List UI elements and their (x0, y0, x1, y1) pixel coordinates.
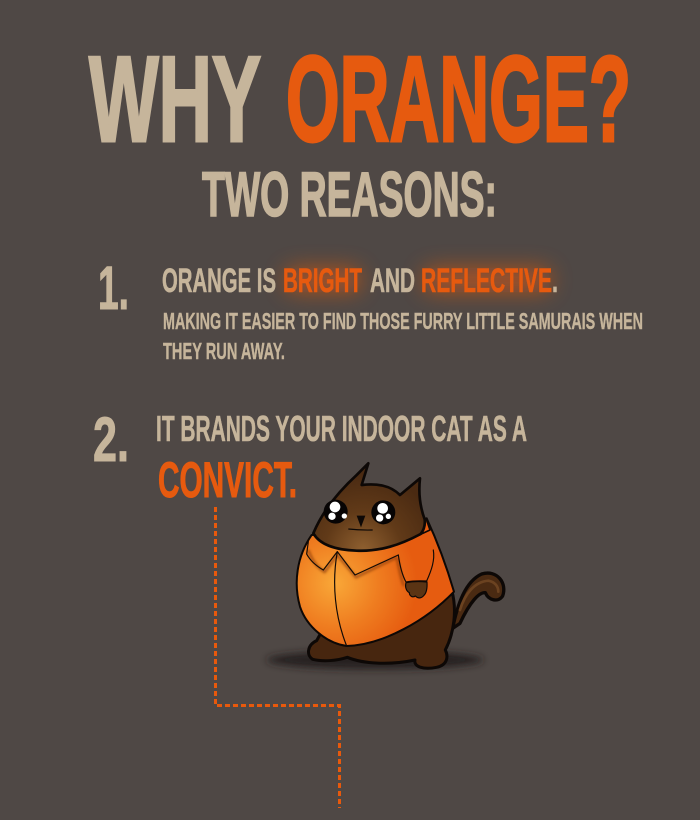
cat nose (357, 516, 365, 527)
number 2: 2. (93, 405, 129, 475)
cat head (313, 463, 425, 551)
title: WHY (89, 31, 261, 167)
reason 1 detail: THEY RUN AWAY. (163, 338, 285, 364)
convict word: CONVICT. (158, 452, 297, 508)
reason 2 (93, 405, 527, 508)
cat mouth (348, 529, 373, 530)
reason 1 heading (162, 262, 558, 300)
cat paw (406, 582, 427, 598)
cat illustration (267, 463, 504, 669)
cat body and legs (308, 590, 454, 668)
number 1: 1. (98, 254, 129, 322)
cat shirt (297, 518, 454, 646)
glow behind highlighted words (285, 268, 551, 292)
reason 1 heading: BRIGHT (283, 262, 362, 300)
subtitle: TWO REASONS: (202, 160, 497, 230)
reason 1 heading: AND (370, 262, 415, 300)
reason 1 heading: ORANGE IS (162, 262, 276, 300)
shirt shadows (308, 550, 404, 586)
cat left eye (324, 500, 348, 524)
reason 1 heading: REFLECTIVE (421, 262, 552, 300)
reason 1 heading: . (552, 262, 558, 300)
reason 1 detail (163, 308, 643, 364)
title (89, 31, 631, 167)
cat shadow (267, 651, 483, 669)
collar edge line (418, 518, 430, 535)
arrow: dotted connector (216, 507, 340, 808)
cat tail (453, 573, 504, 628)
reason 1 (98, 254, 643, 364)
cat right eye (371, 500, 395, 524)
shirt collar and seams (307, 542, 434, 646)
